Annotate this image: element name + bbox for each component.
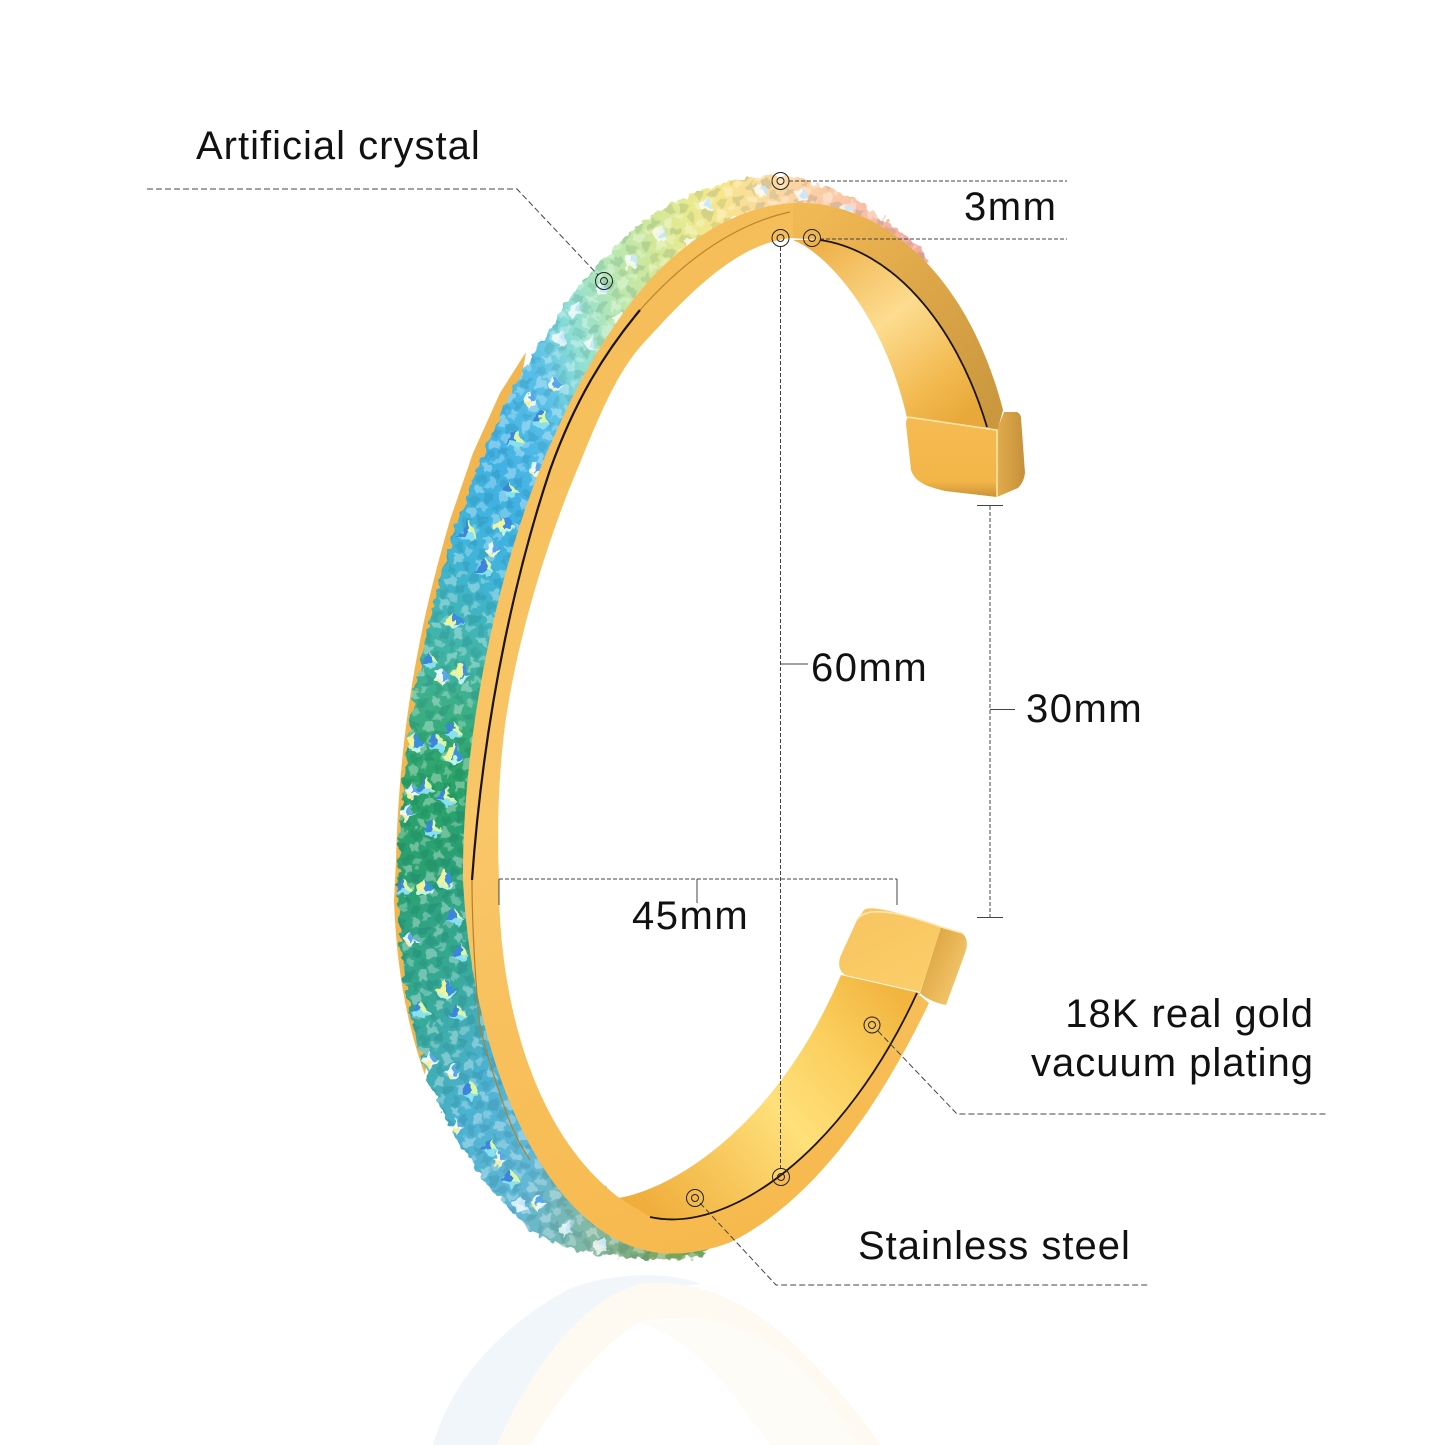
- marker: steel: [686, 1190, 704, 1206]
- label: 18K real gold vacuum plating: 18K real gold: [1065, 992, 1314, 1036]
- label: 3mm: 3mm: [964, 185, 1057, 229]
- leader: stainless steel: [700, 1203, 1148, 1285]
- 3mm measure lines: [789, 181, 1067, 239]
- marker: bottom: [772, 1168, 790, 1186]
- marker: crystal: [596, 272, 612, 290]
- lower black edge: [650, 993, 917, 1219]
- lower arm inner surface: [618, 975, 920, 1219]
- 60mm vertical measure: [780, 247, 808, 1168]
- crystal band: [395, 174, 929, 1262]
- marker: top outer: [772, 172, 789, 190]
- rim groove line: [472, 310, 640, 880]
- label: 18K real gold vacuum plating: [1031, 992, 1314, 1085]
- leader: 18K real gold: [878, 1031, 1327, 1114]
- 30mm vertical measure: [977, 506, 1015, 918]
- marker: gold plating: [864, 1017, 880, 1033]
- marker: top inner: [772, 230, 789, 246]
- label: 60mm: 60mm: [811, 646, 928, 690]
- label: 30mm: 30mm: [1026, 687, 1143, 731]
- lower clasp: [839, 908, 967, 1005]
- upper clasp: [906, 412, 1025, 497]
- label: stainless steel: Stainless steel: [858, 1224, 1131, 1268]
- leader: artificial crystal: [147, 189, 598, 275]
- marker: top rim: [804, 230, 820, 246]
- label: 18K real gold vacuum plating: vacuum plating: [1031, 1041, 1314, 1085]
- front gold rim: [463, 203, 1003, 1254]
- label: artificial crystal: Artificial crystal: [196, 124, 481, 168]
- 45mm horizontal measure: [499, 879, 897, 905]
- upper arm inner surface: [793, 240, 990, 432]
- label: 45mm: 45mm: [632, 894, 749, 938]
- upper black edge: [820, 240, 987, 427]
- right rim shaded section: [793, 203, 1003, 432]
